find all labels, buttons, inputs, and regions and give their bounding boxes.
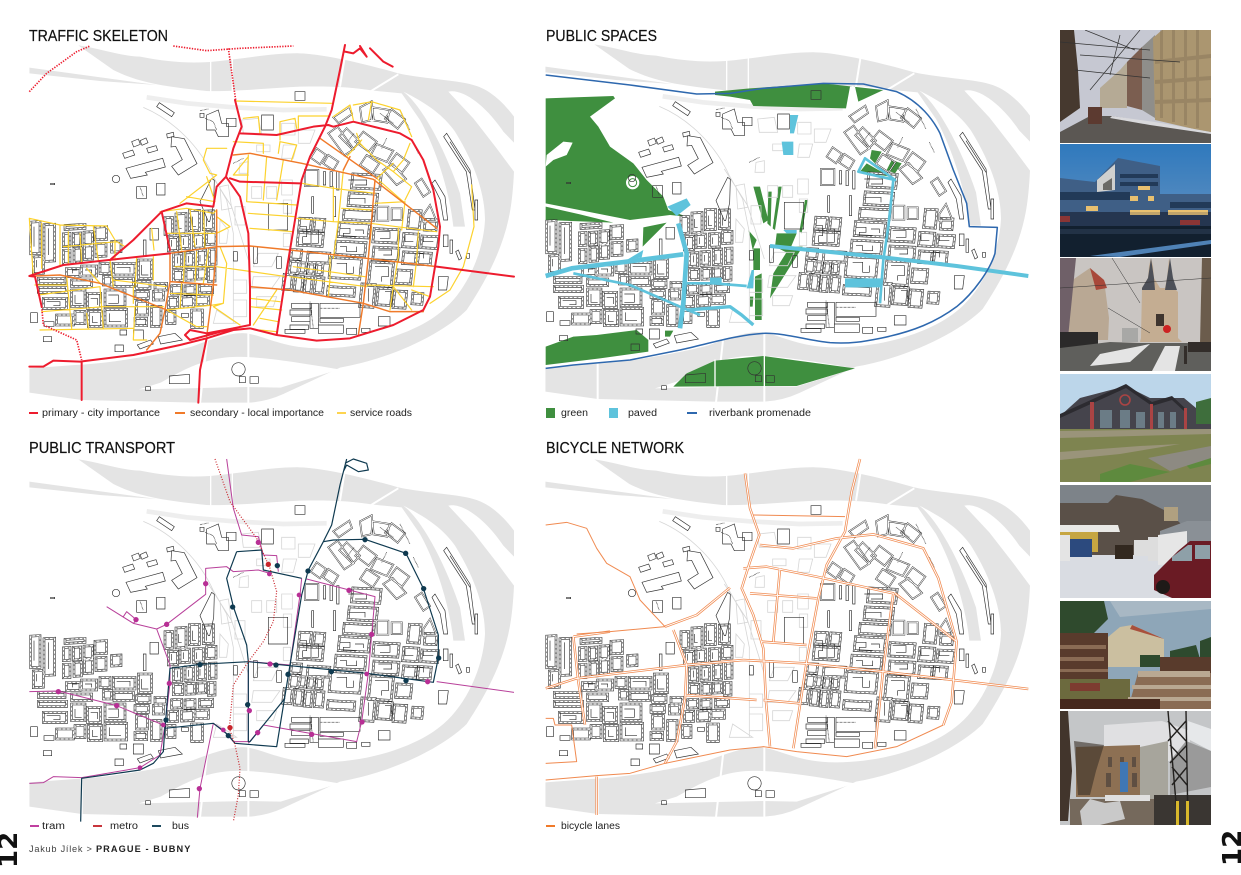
footer credit: Jakub Jílek > PRAGUE - BUBNY	[29, 844, 191, 854]
photo: brick depot with tracks	[1060, 374, 1211, 482]
panel: bicycle network	[545, 440, 1030, 832]
photo: townhouses behind wall with graffiti	[1060, 711, 1211, 825]
photo: office building at dusk	[1060, 144, 1211, 257]
map: riverbank promenade	[546, 75, 997, 368]
map: green areas	[546, 83, 902, 387]
heading: public spaces: PUBLIC SPACES	[546, 28, 657, 45]
map: traffic network lines	[29, 45, 514, 403]
heading: bicycle network: BICYCLE NETWORK	[546, 440, 685, 457]
photo: snowy car park	[1060, 485, 1211, 598]
legend: public transport: tram	[42, 821, 65, 832]
legend: traffic skeleton	[29, 408, 412, 419]
panel: traffic skeleton	[29, 28, 514, 419]
legend: public transport	[30, 821, 189, 832]
map: river base	[545, 44, 1030, 402]
map: public transport base	[29, 459, 514, 817]
legend: public spaces: riverbank promenade	[709, 408, 811, 419]
photo strip	[1060, 30, 1212, 825]
legend: public spaces: paved	[628, 408, 657, 419]
map: bicycle lanes	[546, 459, 1028, 815]
panel: public spaces	[545, 28, 1030, 419]
legend: public transport: bus	[172, 821, 189, 832]
legend: public transport: metro	[110, 821, 138, 832]
map: building footprints	[547, 91, 994, 390]
photo: street with tram	[1060, 30, 1211, 143]
legend: public spaces	[546, 408, 811, 419]
heading: traffic skeleton: TRAFFIC SKELETON	[29, 28, 168, 45]
legend: bicycle network: bicycle lanes	[561, 821, 620, 832]
legend: traffic skeleton: secondary - local importance	[190, 408, 324, 419]
map: traffic skeleton base	[29, 45, 514, 403]
legend: traffic skeleton: primary - city importance	[42, 408, 160, 419]
map: paved areas	[546, 115, 1028, 328]
map: bicycle network base	[545, 459, 1030, 817]
photo: church and tram tracks	[1060, 258, 1211, 371]
map: transit lines and stops	[29, 459, 514, 822]
legend: public spaces: green	[561, 408, 588, 419]
panel: public transport	[29, 440, 514, 832]
legend: traffic skeleton: service roads	[350, 408, 412, 419]
photo: railway sleepers and house	[1060, 601, 1211, 709]
heading: public transport: PUBLIC TRANSPORT	[29, 440, 175, 457]
